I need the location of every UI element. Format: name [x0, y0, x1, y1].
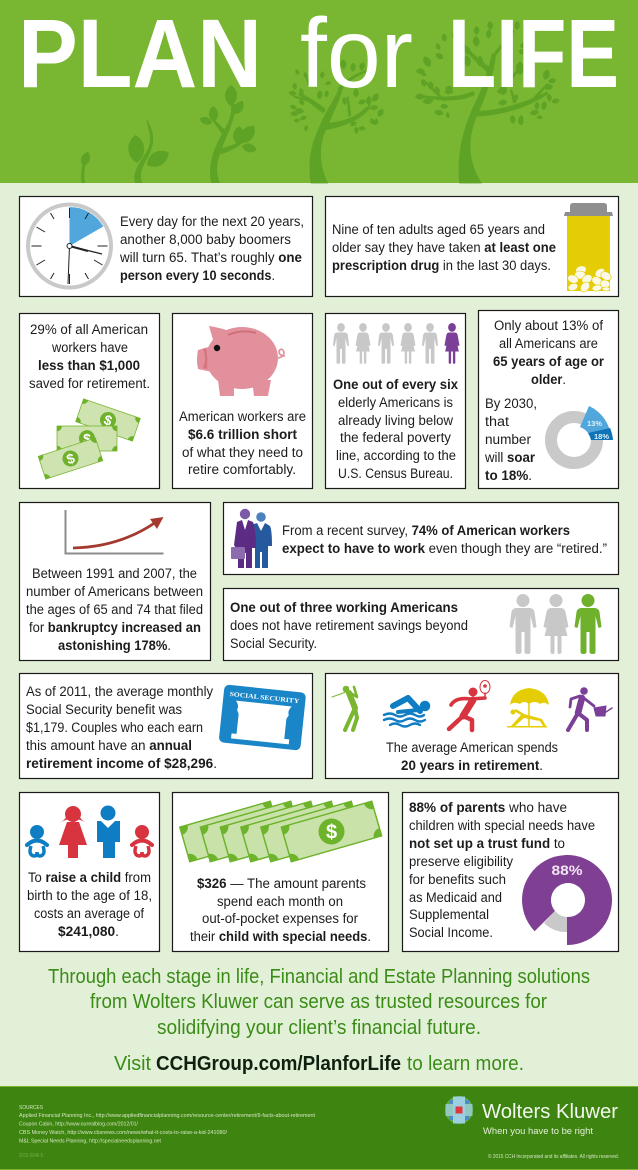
text: not set up a trust fund: 88% of parents who have	[409, 800, 567, 816]
text: less than $1,000: saved for retirement.	[29, 376, 150, 392]
text: one person every 10 seconds: will turn 65. That’s roughly one	[119, 250, 302, 266]
text: raise a child cost: $241,080.	[58, 924, 119, 940]
text: 20 years in retirement: The average American spends	[386, 740, 558, 756]
text: 74% of American workers: From a recent survey, 74% of American workers	[282, 523, 570, 539]
text: bankruptcy increased 178%: for bankruptcy increased an	[29, 620, 201, 636]
text: $6.6 trillion short: $6.6 trillion short	[188, 427, 297, 443]
text: raise a child cost: costs an average of	[34, 906, 144, 922]
text: $326 per month: $326 — The amount parents	[197, 876, 366, 892]
text: not set up a trust fund: preserve eligibility	[409, 854, 514, 870]
icon: family	[27, 806, 152, 858]
title: for	[300, 0, 413, 108]
text: social security income: retirement income of $28,296.	[26, 756, 217, 772]
panel: 13 percent 65 or older	[478, 310, 618, 488]
text: $326 per month: their child with special needs.	[190, 929, 371, 945]
chart: rising curve	[66, 510, 164, 554]
text: no retirement savings: Social Security.	[230, 636, 317, 652]
panel: one out of six	[326, 314, 466, 488]
text: $6.6 trillion short: retire comfortably.	[188, 462, 296, 478]
text: bankruptcy increased 178%: Between 1991 and 2007, the	[32, 566, 197, 582]
text: poverty line: elderly Americans is	[338, 395, 453, 411]
panel: less than $1,000 saved	[20, 314, 160, 488]
sources: Applied Financial Planning Inc., http://www.appliedfinancialplanning.com/resource-center/retirement/9-facts-about-retirement	[19, 1113, 315, 1119]
closing message: from Wolters Kluwer can serve as trusted resources for	[90, 991, 547, 1013]
icon: beach umbrella	[507, 688, 549, 728]
text: poverty line: line, according to the	[336, 448, 456, 464]
text: prescription drug	[332, 222, 556, 274]
text: $326 per month: out-of-pocket expenses for	[202, 911, 358, 927]
text: prescription drug: older say they have taken at least one	[332, 240, 556, 256]
text: 65 years of age or older: 65 years of age or	[493, 354, 604, 370]
text: social security income: As of 2011, the average monthly	[26, 684, 214, 700]
text: soar to 18%: to 18%.	[485, 468, 532, 484]
wordmark: Wolters Kluwer: When you have to be right	[483, 1126, 593, 1137]
text: one person every 10 seconds: Every day for the next 20 years,	[120, 214, 304, 230]
text: 65 years of age or older: older.	[531, 372, 566, 388]
sprout 1	[79, 150, 92, 183]
text: prescription drug: prescription drug in the last 30 days.	[332, 258, 551, 274]
text: prescription drug: Nine of ten adults aged 65 years and	[332, 222, 545, 238]
text: $326 per month	[190, 876, 371, 945]
label: 88%: 88%	[552, 862, 583, 878]
panel: 20 years in retirement	[326, 674, 618, 778]
icon: stack of bills	[180, 801, 382, 862]
sources: 2015-0046-5	[19, 1153, 43, 1159]
sprout 2	[128, 119, 172, 183]
icon: business people	[231, 509, 272, 568]
text: $326 per month: spend each month on	[217, 894, 343, 910]
text: 65 years of age or older: Only about 13% of	[494, 318, 603, 334]
text: $6.6 trillion short: of what they need to	[182, 445, 303, 461]
closing message: solidifying your client’s financial future.	[157, 1017, 481, 1039]
closing message	[48, 966, 590, 1039]
panel: special needs expenses	[172, 792, 388, 952]
text: 20 years in retirement	[386, 740, 558, 774]
text: 65 years of age or older: all Americans are	[499, 336, 598, 352]
panel: expect to work	[224, 502, 618, 574]
icon: gardener	[568, 687, 612, 730]
icon: dollar bills	[38, 399, 140, 479]
text: $6.6 trillion short: American workers are	[179, 409, 306, 425]
panel: trust fund	[402, 792, 618, 952]
text: not set up a trust fund: Supplemental	[409, 907, 489, 923]
call to action	[114, 1053, 524, 1075]
text: not set up a trust fund: for benefits such	[409, 872, 506, 888]
icon: dollar bills: $	[102, 411, 114, 429]
panel: prescription drugs	[326, 196, 618, 296]
text: 74% of American workers: expect to have to work even though they are “retired.”	[282, 541, 607, 557]
text: poverty line: the federal poverty	[340, 430, 452, 446]
chart: population donut	[551, 406, 613, 463]
sources: M&L Special Needs Planning, http://specialneedsplanning.net	[19, 1138, 161, 1144]
wordmark: Wolters Kluwer	[482, 1101, 618, 1137]
text: poverty line: One out of every six	[333, 377, 458, 393]
text: social security income: $1,179. Couples who each earn	[26, 720, 203, 736]
closing message: Through each stage in life, Financial and Estate Planning solutions	[48, 966, 590, 988]
logo: Wolters Kluwer mark	[445, 1096, 473, 1124]
icon: clock	[28, 204, 111, 288]
header banner	[0, 0, 638, 183]
text: not set up a trust fund: not set up a trust fund to	[409, 836, 565, 852]
text: one person every 10 seconds	[119, 214, 304, 284]
icon: piggy bank	[197, 326, 285, 396]
text: less than $1,000: workers have	[51, 340, 128, 356]
icon: pill bottle	[564, 203, 613, 294]
text: not set up a trust fund: children with special needs have	[409, 818, 595, 834]
text: 65 years of age or older	[493, 318, 604, 388]
footer	[0, 1086, 638, 1170]
text: social security income	[26, 684, 217, 772]
text: no retirement savings: One out of three working Americans	[230, 600, 458, 616]
text: less than $1,000	[29, 322, 150, 392]
call to action: CCHGroup.com/PlanforLife	[156, 1053, 401, 1075]
text: social security income: this amount have an annual	[26, 738, 192, 754]
call to action: to learn more.	[407, 1053, 524, 1075]
sprout 3	[199, 85, 259, 183]
icon: tennis player	[449, 680, 490, 730]
text: not set up a trust fund	[409, 800, 595, 941]
panel: piggy bank	[172, 314, 312, 488]
sources: Coupon Cabin, http://www.ourealblog.com/2012/01/	[19, 1122, 138, 1128]
text: raise a child cost	[27, 870, 152, 940]
panel: raise a child	[20, 792, 160, 952]
panel: one out of three	[224, 588, 618, 660]
text: less than $1,000: less than $1,000	[38, 358, 140, 374]
icon: social security card	[219, 684, 306, 751]
text: soar to 18%: number	[485, 432, 531, 448]
text: $6.6 trillion short	[179, 409, 306, 478]
icon: social security card: SOCIAL SECURITY	[229, 691, 300, 705]
call to action: Visit	[114, 1053, 151, 1075]
tree 2	[415, 21, 560, 183]
icon: stack of bills: $	[326, 822, 337, 844]
text: soar to 18%	[484, 396, 537, 484]
icon: six people	[333, 323, 460, 364]
text: soar to 18%: will soar	[484, 450, 535, 466]
text: bankruptcy increased 178%: the ages of 65 and 74 that filed	[26, 602, 203, 618]
title	[18, 0, 619, 108]
text: soar to 18%: that	[485, 414, 509, 430]
label: 13%: 13%	[587, 419, 602, 428]
wordmark: Wolters Kluwer: Wolters Kluwer	[482, 1101, 618, 1123]
text: less than $1,000: 29% of all American	[30, 322, 148, 338]
tree 1	[288, 59, 385, 183]
panel: bankruptcy	[20, 502, 210, 660]
icon: dollar bills: $	[83, 430, 91, 446]
text: bankruptcy increased 178%	[26, 566, 203, 654]
label: 18%: 18%	[594, 432, 609, 441]
text: soar to 18%: By 2030,	[485, 396, 537, 412]
panel: baby boomers clock	[20, 196, 312, 296]
sources: CBS Money Watch, http://www.cbsnews.com/news/what-it-costs-to-raise-a-kid-241080/	[19, 1130, 227, 1136]
copyright: © 2015 CCH Incorporated and its affiliates. All rights reserved.	[488, 1153, 619, 1160]
sources	[19, 1105, 315, 1159]
text: no retirement savings	[230, 600, 468, 652]
text: 20 years in retirement: 20 years in retirement.	[401, 758, 543, 774]
text: bankruptcy increased 178%: number of Americans between	[26, 584, 203, 600]
sources: SOURCES	[19, 1105, 43, 1111]
icon: dollar bills: $	[64, 450, 77, 467]
text: no retirement savings: does not have retirement savings beyond	[230, 618, 468, 634]
text: one person every 10 seconds: person every 10 seconds.	[120, 268, 275, 284]
text: social security income: Social Security benefit was	[26, 702, 182, 718]
text: poverty line: already living below	[338, 413, 454, 429]
chart: 88 percent donut	[522, 855, 612, 945]
text: not set up a trust fund: as Medicaid and	[409, 890, 502, 906]
text: poverty line	[333, 377, 458, 482]
text: 74% of American workers	[282, 523, 607, 557]
text: not set up a trust fund: Social Income.	[409, 925, 493, 941]
illustration: growing trees	[79, 21, 560, 183]
text: poverty line: U.S. Census Bureau.	[338, 466, 453, 482]
icon: three people	[510, 594, 602, 654]
text: raise a child cost: birth to the age of 18,	[27, 888, 152, 904]
title: PLAN	[18, 0, 262, 108]
text: bankruptcy increased 178%: astonishing 178%.	[58, 638, 171, 654]
icon: swimmer	[384, 698, 430, 726]
text: raise a child cost: To raise a child from	[28, 870, 151, 886]
panel: social security benefit	[20, 674, 312, 778]
icon: golfer	[332, 686, 357, 730]
text: one person every 10 seconds: another 8,000 baby boomers	[120, 232, 291, 248]
